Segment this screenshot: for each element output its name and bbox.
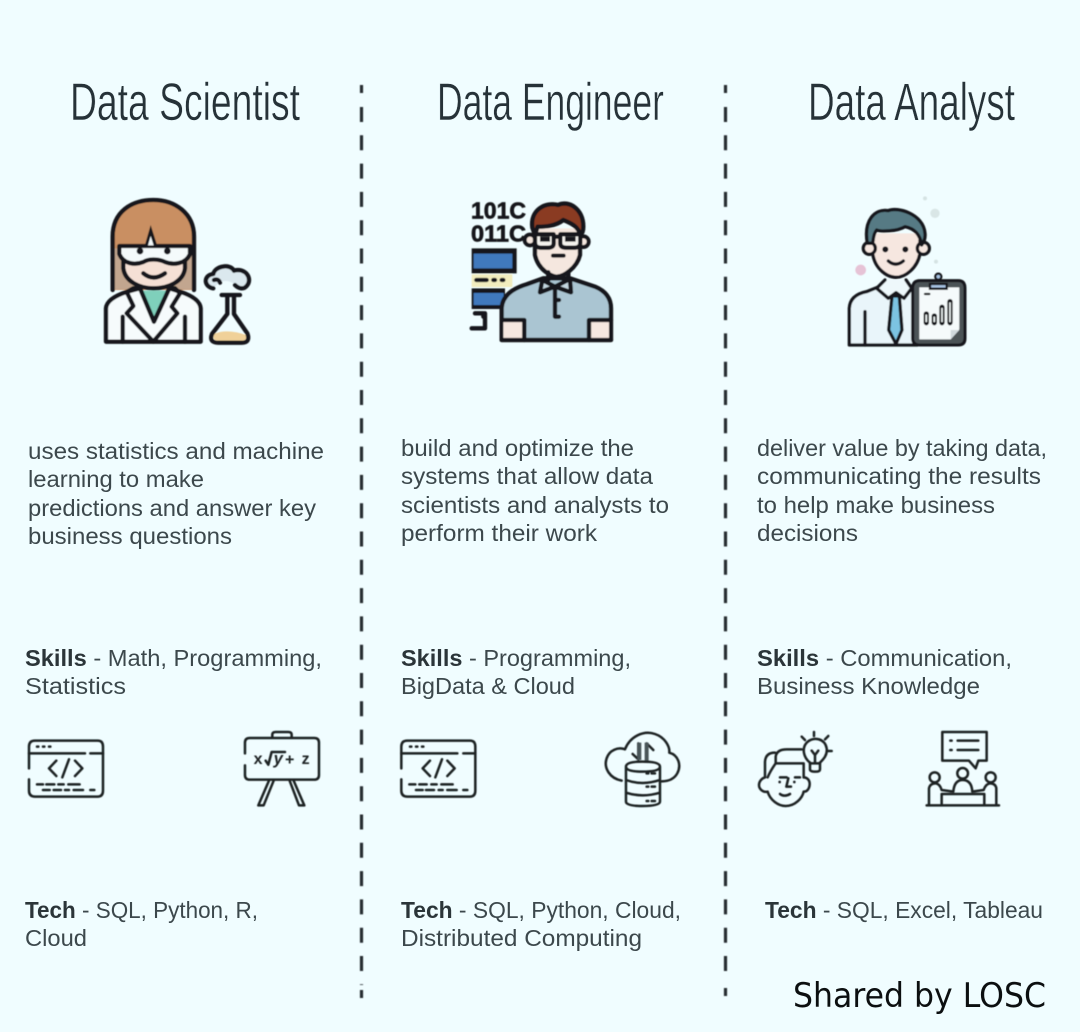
skills: data analyst: Business Knowledge [757,673,980,699]
icon: math board: z [302,751,310,768]
icon: math board: y [273,749,284,768]
description: data engineer [401,435,669,546]
tech: data analyst: Tech - SQL, Excel, Tableau [765,897,1043,923]
description: data analyst: deliver value by taking data, [757,435,1047,461]
description: data analyst: decisions [757,520,858,546]
tech: data scientist: Tech - SQL, Python, R, [25,897,258,923]
icon: engineer with binary and servers: 011C [471,221,526,247]
icon: analyst with clipboard [849,196,965,345]
description: data scientist: predictions and answer key [28,495,316,521]
tech: data engineer [401,897,681,951]
skills: data analyst [757,645,1012,699]
icon: engineer with binary and servers [471,197,611,340]
panel: data analyst [757,73,1047,923]
heading: data scientist: Data Scientist [70,73,300,132]
icon: code window [401,741,475,797]
tech: data engineer: Tech - SQL, Python, Cloud, [401,897,681,923]
description: data analyst [757,435,1047,546]
skills: data scientist: Statistics [25,673,126,699]
description: data engineer: scientists and analysts to [401,492,669,518]
skills: data scientist: Skills - Math, Programming, [25,645,322,671]
icon: math board: + [285,752,294,769]
description: data analyst: communicating the results [757,463,1041,489]
description: data scientist: uses statistics and machine [28,438,324,464]
icon: scientist with flask [106,200,249,343]
description: data scientist: learning to make [28,466,204,492]
description: data scientist: business questions [28,523,232,549]
skills: data analyst: Skills - Communication, [757,645,1012,671]
divider: right dashed line [724,85,727,996]
tech: data engineer: Distributed Computing [401,925,642,951]
panel: data scientist [25,73,324,951]
icon: math board [245,732,319,805]
tech: data scientist [25,897,258,951]
divider: left dashed line [360,85,363,998]
skills: data engineer: BigData & Cloud [401,673,575,699]
icon: head with light bulb [759,732,832,806]
icon: math board: x [254,751,263,768]
panel: data engineer [401,73,681,951]
description: data scientist [28,438,324,549]
skills: data scientist [25,645,322,699]
description: data engineer: build and optimize the [401,435,634,461]
icon: engineer with binary and servers: 101C [471,197,526,223]
icon: team meeting with speech bubble [927,732,999,805]
description: data engineer: perform their work [401,520,597,546]
heading: data engineer: Data Engineer [437,73,664,132]
tech: data scientist: Cloud [25,925,87,951]
icon: cloud database [606,733,679,806]
description: data analyst: to help make business [757,492,995,518]
skills: data engineer [401,645,631,699]
skills: data engineer: Skills - Programming, [401,645,631,671]
icon: code window [29,741,103,797]
attribution: shared by LOSC: Shared by LOSC [793,976,1046,1016]
description: data engineer: systems that allow data [401,463,654,489]
